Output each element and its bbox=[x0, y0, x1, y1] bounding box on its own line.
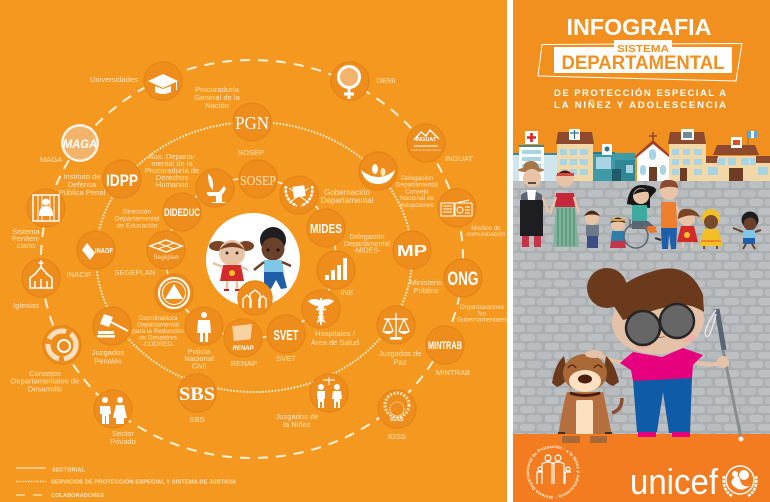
node: INACIF bbox=[77, 231, 115, 269]
label: Aux. Departamental de la Procuraduría de Derechos Humanos: Procuraduría de bbox=[145, 166, 199, 175]
label: Coordinadora Departamental para la Reducción de Desastres CODRED: -CODRED- bbox=[142, 341, 174, 348]
node: Consejos Departamentales bbox=[43, 326, 81, 364]
label: Procuraduría General de la Nación: Nación bbox=[205, 101, 229, 110]
node: PGN bbox=[233, 103, 271, 141]
node: INE bbox=[317, 251, 355, 289]
middle ring: special protection services bbox=[96, 122, 412, 392]
center illustration: two children bbox=[206, 213, 300, 307]
node: INGUAT: Instituto Guatemalteco bbox=[411, 148, 441, 152]
label: Juzgados de Paz: Paz bbox=[393, 358, 407, 366]
label: DEMI: DEMI bbox=[377, 76, 395, 85]
label: Coordinadora Departamental para la Reducción de Desastres CODRED: para la Reducción bbox=[132, 328, 184, 335]
label: Dirección Departamental de Educación: Dirección bbox=[123, 208, 151, 216]
label: INACIF: INACIF bbox=[67, 270, 92, 279]
label: Juzgados Penales: Juzgados bbox=[92, 348, 124, 357]
label: SVET: SVET bbox=[276, 354, 296, 363]
logo: unicef wordmark: unicef bbox=[630, 461, 719, 502]
girl in red bbox=[677, 209, 700, 248]
node: Gobernación Departamental bbox=[280, 176, 318, 214]
label: Universidades: Universidades bbox=[90, 75, 138, 84]
label: Delegación Departamental MIDES: -MIDES- bbox=[354, 248, 381, 255]
subtitle bbox=[554, 87, 726, 111]
label: Policía Nacional Civil: Nacional bbox=[184, 354, 214, 363]
hair bbox=[610, 268, 704, 320]
node: Sector Privado bbox=[94, 390, 132, 428]
legend: collaborators bbox=[16, 493, 104, 499]
node: PGN: PGN bbox=[235, 113, 269, 133]
label: Consejos Departamentales de Desarrollo: Departamentales de bbox=[11, 377, 79, 386]
label: Dirección Departamental de Educación: de Educación bbox=[116, 222, 158, 230]
label: Sector Privado: Privado bbox=[110, 437, 136, 446]
label: MINTRAB: MINTRAB bbox=[436, 368, 470, 377]
label: Procuraduría General de la Nación: General de la bbox=[194, 93, 241, 102]
cobblestone ground bbox=[513, 181, 770, 434]
label: Consejos Departamentales de Desarrollo: Desarrollo bbox=[28, 384, 62, 393]
label: Delegación Departamental MIDES: Departamental bbox=[344, 241, 390, 248]
panel: network diagram background bbox=[0, 0, 507, 502]
label: Instituto de Defensa Pública Penal: Pública Penal bbox=[59, 188, 106, 197]
legend bbox=[16, 468, 236, 499]
node: IDPP bbox=[103, 160, 141, 198]
label: Procuraduría General de la Nación: Procuraduría bbox=[195, 85, 239, 94]
head bbox=[563, 354, 607, 392]
panel: footer bbox=[513, 434, 770, 502]
label: MAGA: MAGA bbox=[40, 155, 63, 164]
label: Juzgados Penales: Penales bbox=[94, 356, 122, 366]
church bbox=[634, 132, 672, 181]
illustration: girl with glasses and white cane bbox=[587, 268, 741, 438]
label: Aux. Departamental de la Procuraduría de Derechos Humanos: Derechos bbox=[156, 173, 188, 182]
hand bbox=[717, 356, 729, 368]
label: Delegación Departamental Consejo Nacional de Adopciones: Departamental bbox=[396, 182, 438, 189]
label: SBS: SBS bbox=[189, 415, 205, 424]
node: family institution bbox=[238, 281, 272, 315]
logo: Sistema Departamental seal: Sistema Departamental de Protección · a la Niñez y Adolescencia · bbox=[526, 444, 580, 499]
node: Segeplan bbox=[147, 231, 185, 269]
label: Coordinadora Departamental para la Reducción de Desastres CODRED: de Desastres bbox=[139, 334, 177, 342]
label: Dirección Departamental de Educación: Departamental bbox=[115, 216, 160, 222]
label: Aux. Departamental de la Procuraduría de Derechos Humanos: mental de la bbox=[151, 159, 193, 168]
node: MINTRAB: MINTRAB bbox=[428, 340, 462, 352]
title: INFOGRAFIA bbox=[566, 14, 712, 40]
node: MIDES: MIDES bbox=[310, 221, 342, 236]
node: Consejo Nacional de Adopciones bbox=[359, 152, 397, 190]
legend: collaborators: COLABORADORES bbox=[51, 493, 104, 499]
node: ONG: ONG bbox=[448, 269, 478, 290]
shoes bbox=[638, 432, 690, 437]
node: SBS: SBS bbox=[179, 384, 215, 405]
head bbox=[609, 284, 707, 358]
node: CODRED bbox=[155, 274, 193, 312]
woman in huipil bbox=[550, 169, 579, 247]
hospital bbox=[513, 131, 557, 181]
boy in blue bbox=[733, 212, 761, 249]
sunglasses bbox=[626, 311, 660, 345]
label: Medios de comunicación: Medios de bbox=[471, 225, 501, 232]
title banner: DEPARTAMENTAL bbox=[562, 53, 725, 74]
label: Sector Privado: Sector bbox=[112, 429, 134, 438]
label: INGUAT: INGUAT bbox=[445, 154, 473, 163]
girl in wheelchair bbox=[624, 185, 661, 248]
girl in yellow bbox=[699, 209, 723, 249]
outer ring: collaborators bbox=[41, 60, 463, 458]
node: MP: MP bbox=[397, 243, 427, 260]
pants bbox=[633, 378, 692, 433]
ears bbox=[552, 356, 619, 387]
small boy bbox=[584, 210, 600, 248]
label: Hospitales / Área de Salud: Área de Salud bbox=[311, 338, 359, 347]
logo: unicef emblem bbox=[724, 466, 756, 496]
node: Hospitales / Área de Salud bbox=[302, 290, 340, 328]
node: MAGA: MAGA bbox=[63, 137, 97, 151]
label: IGSS: IGSS bbox=[388, 432, 406, 441]
node: SBS bbox=[178, 374, 216, 412]
subtitle: DE PROTECCIÓN ESPECIAL A bbox=[554, 87, 726, 99]
node: Juzgados Penales bbox=[93, 307, 131, 345]
panel: cover bbox=[513, 0, 770, 182]
node: Iglesias bbox=[22, 259, 60, 297]
label: RENAP: RENAP bbox=[231, 359, 257, 368]
tail bbox=[612, 398, 622, 413]
label: Coordinadora Departamental para la Reducción de Desastres CODRED: Departamental bbox=[137, 322, 179, 328]
small girl bbox=[610, 217, 626, 248]
label: Instituto de Defensa Pública Penal: Defensa bbox=[68, 180, 97, 189]
node: Policía Nacional Civil bbox=[185, 307, 223, 345]
label: Coordinadora Departamental para la Reducción de Desastres CODRED: Coordinadora bbox=[139, 315, 177, 322]
node: RENAP: RENAP bbox=[232, 346, 254, 352]
node: IDPP: IDPP bbox=[106, 171, 138, 190]
label: SOSEP: SOSEP bbox=[238, 148, 264, 157]
node: INACIF: INAOF bbox=[95, 248, 114, 255]
label: Aux. Departamental de la Procuraduría de Derechos Humanos: Aux. Departa- bbox=[149, 152, 195, 161]
node: MP bbox=[393, 231, 431, 269]
label: Consejos Departamentales de Desarrollo: Consejos bbox=[29, 369, 61, 378]
shirt bbox=[620, 348, 703, 381]
label: Instituto de Defensa Pública Penal: Instituto de bbox=[63, 172, 101, 181]
label: Medios de comunicación: comunicación bbox=[466, 231, 506, 238]
node: Juzgados de la Niñez bbox=[310, 374, 348, 412]
node: DIDEDUC bbox=[163, 193, 201, 231]
label: Sistema Penitenciario: Peniten- bbox=[12, 234, 41, 243]
legend: sectorial bbox=[16, 468, 86, 474]
label: Iglesias: Iglesias bbox=[13, 301, 39, 310]
label: Juzgados de la Niñez: Juzgados de bbox=[275, 412, 319, 421]
label: Aux. Departamental de la Procuraduría de Derechos Humanos: Humanos bbox=[156, 180, 188, 189]
node: Auxiliatura PDH bbox=[196, 169, 234, 207]
label: Delegación Departamental Consejo Nacional de Adopciones: Consejo bbox=[405, 188, 429, 195]
building 1 bbox=[556, 129, 594, 181]
node: Universidades bbox=[144, 62, 182, 100]
node: RENAP bbox=[224, 319, 262, 357]
illustration: group of people bbox=[518, 161, 761, 249]
label: Organizaciones No Gubernamentales: No bbox=[478, 310, 487, 317]
title banner bbox=[538, 40, 742, 81]
label: Juzgados de la Niñez: la Niñez bbox=[283, 420, 311, 429]
node: ONG bbox=[444, 259, 482, 297]
node: SVET: SVET bbox=[274, 327, 298, 344]
node: IGSS bbox=[378, 390, 416, 428]
label: SEGEPLAN: SEGEPLAN bbox=[115, 268, 155, 277]
label: Hospitales / Área de Salud: Hospitales / bbox=[315, 329, 355, 338]
owner hand on head bbox=[585, 350, 603, 358]
title banner: SISTEMA bbox=[617, 44, 669, 55]
body bbox=[558, 392, 612, 436]
blush and mouth bbox=[635, 341, 651, 349]
node: MAGA bbox=[61, 124, 99, 162]
node: INGUAT bbox=[407, 124, 445, 162]
node: IGSS: IGSS bbox=[390, 417, 404, 423]
label: Organizaciones No Gubernamentales: Gubernamentales bbox=[457, 317, 507, 324]
teal building bbox=[593, 144, 635, 181]
node: SOSEP bbox=[239, 160, 277, 198]
boy bbox=[254, 227, 291, 289]
arms bbox=[598, 354, 723, 364]
building 2 bbox=[668, 129, 706, 181]
building 3 with flag bbox=[706, 131, 770, 181]
node: Segeplan: Segeplan bbox=[153, 255, 179, 261]
legend: sectorial: SECTORIAL bbox=[52, 468, 86, 474]
label: Gobernación Departamental: Gobernación bbox=[324, 188, 370, 197]
label: Gobernación Departamental: Departamental bbox=[321, 196, 373, 205]
label: Policía Nacional Civil: Civil bbox=[192, 361, 206, 370]
label: Sistema Penitenciario: Sistema bbox=[12, 227, 40, 236]
legend: services: SERVICIOS DE PROTECCIÓN ESPECIAL Y SISTEMA DE JUSTICIA bbox=[51, 478, 236, 486]
label: Sistema Penitenciario: ciario bbox=[17, 241, 35, 250]
label: Delegación Departamental Consejo Nacional de Adopciones: Delegación bbox=[401, 175, 433, 182]
subtitle: LA NIÑEZ Y ADOLESCENCIA bbox=[554, 100, 726, 111]
cane bbox=[723, 350, 741, 438]
node: DEMI bbox=[331, 62, 369, 100]
label: Policía Nacional Civil: Policía bbox=[188, 347, 210, 356]
divider stripe bbox=[507, 0, 513, 502]
girl bbox=[209, 240, 254, 290]
illustration: street of buildings bbox=[513, 129, 770, 181]
node: MIDES bbox=[307, 209, 345, 247]
node: SVET bbox=[267, 315, 305, 353]
chest bbox=[576, 400, 593, 436]
label: Ministerio Público: Ministerio bbox=[410, 278, 442, 287]
label: Ministerio Público: Público bbox=[414, 286, 438, 295]
label: Organizaciones No Gubernamentales: Organizaciones bbox=[460, 304, 504, 311]
node: Medios de comunicación bbox=[438, 189, 476, 227]
node: MINTRAB bbox=[426, 326, 464, 364]
teen boy bbox=[660, 180, 680, 249]
illustration: guide dog bbox=[552, 350, 622, 438]
node: INGUAT: INGUAT bbox=[416, 137, 437, 143]
label: Juzgados de Paz: Juzgados de bbox=[378, 349, 422, 358]
man in hat bbox=[518, 161, 548, 247]
node: Sistema Penitenciario bbox=[27, 189, 65, 227]
label: INE: INE bbox=[341, 288, 353, 297]
node: Juzgados de Paz bbox=[377, 306, 415, 344]
node: SOSEP: SOSEP bbox=[240, 174, 276, 189]
label: Delegación Departamental Consejo Nacional de Adopciones: Adopciones bbox=[400, 202, 434, 209]
label: Delegación Departamental Consejo Nacional de Adopciones: Nacional de bbox=[400, 195, 434, 202]
paws, shoes and cane tip over footer bbox=[562, 424, 744, 443]
inner ring: sectoral bbox=[166, 178, 336, 338]
node: DIDEDUC: DIDEDUC bbox=[164, 207, 200, 219]
label: Delegación Departamental MIDES: Delegación bbox=[349, 234, 385, 241]
